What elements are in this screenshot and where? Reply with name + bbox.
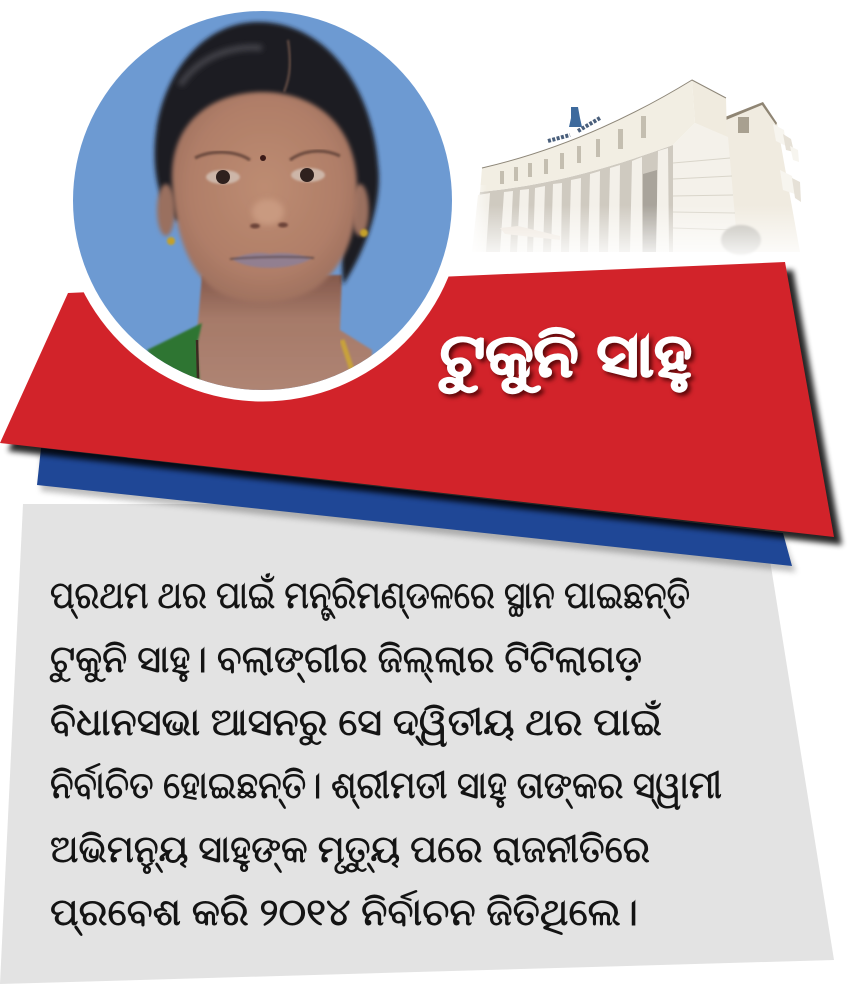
tower block top [692, 80, 727, 137]
right eye [291, 168, 325, 182]
face [172, 92, 357, 303]
balconies [773, 124, 801, 202]
line 3: ବିଧାନସଭା ଆସନରୁ ସେ ଦ୍ୱିତୀୟ ଥର ପାଇଁ [50, 701, 662, 746]
background [70, 8, 460, 398]
panel: grey text background [0, 504, 834, 984]
entrance canopy [500, 226, 560, 240]
line 2: ଟୁକୁନି ସାହୁ। ବଲାଙ୍ଗୀର ଜିଲ୍ଲାର ଟିଟିଲାଗଡ଼ [50, 639, 642, 683]
tree [721, 225, 761, 255]
right wing [725, 102, 800, 252]
earrings [167, 237, 175, 245]
neck [183, 274, 374, 390]
bindi [260, 155, 266, 161]
panel: red banner [0, 262, 834, 537]
attic band [480, 80, 695, 192]
hair parting [284, 40, 290, 92]
panel: blue ribbon [37, 448, 792, 566]
portrait ring [62, 0, 464, 402]
building illustration [465, 80, 810, 263]
columns [472, 148, 669, 252]
nose [250, 199, 288, 228]
lips [230, 253, 314, 268]
body text [50, 574, 722, 935]
ears [157, 184, 175, 236]
hair back [155, 22, 379, 285]
roof emblem and sign [548, 107, 600, 141]
portrait [70, 8, 460, 400]
colonnade recess [472, 145, 675, 252]
line 5: ଅଭିମନ୍ୟୁ ସାହୁଙ୍କ ମୃତ୍ୟୁ ପରେ ରାଜନୀତିରେ [50, 829, 650, 873]
hair strand shine [180, 47, 262, 85]
panel: blue ribbon shadow [41, 454, 796, 572]
vent [738, 117, 749, 133]
left eye [206, 170, 240, 184]
dark glazing [643, 170, 657, 252]
line 1: ପ୍ରଥମ ଥର ପାଇଁ ମନ୍ତ୍ରିମଣ୍ଡଳରେ ସ୍ଥାନ ପାଇଛନ୍ତି [50, 574, 690, 620]
necklace [342, 340, 352, 370]
green sari [146, 322, 204, 380]
attic windows [500, 116, 646, 184]
line 6: ପ୍ରବେଶ କରି ୨୦୧୪ ନିର୍ବାଚନ ଜିତିଥିଲେ। [50, 890, 638, 935]
name heading: ଟୁକୁନି ସାହୁ [438, 322, 692, 394]
eyebrows [195, 152, 250, 160]
bottom fade [465, 205, 810, 263]
line 4: ନିର୍ବାଚିତ ହୋଇଛନ୍ତି। ଶ୍ରୀମତୀ ସାହୁ ତାଙ୍କର ସ୍ୱାମୀ [50, 763, 722, 809]
red banner shadow [8, 270, 842, 545]
corner block [673, 123, 738, 252]
